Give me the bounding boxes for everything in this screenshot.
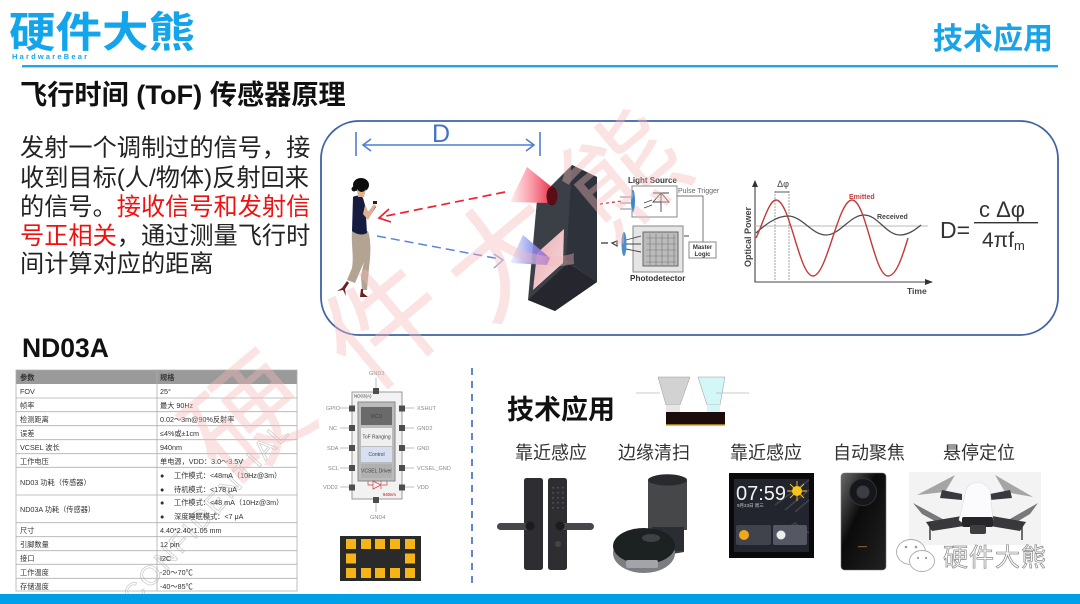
icon: smart display: 07:59 [736, 483, 786, 505]
table: ND03A specs: 误差 [20, 429, 34, 438]
photodetector schematic: Master [693, 245, 713, 251]
formula: 4πf [982, 229, 1014, 252]
text block: explanation: 收到目标(人/物体)反射回来 [20, 165, 309, 192]
watermark: pink brand characters: 大 [419, 168, 594, 345]
table: ND03A specs: 工作温度 [20, 568, 49, 577]
icon: ToF sensor device [510, 165, 597, 311]
labels: application names: 靠近感应 [515, 443, 587, 463]
photodetector schematic [622, 226, 716, 283]
dashed links to schematic [600, 201, 622, 246]
labels: application names [515, 443, 1015, 463]
block diagram: ND03A pinout: GND3 [369, 371, 385, 377]
block diagram: ND03A pinout: GND2 [417, 426, 433, 432]
block diagram: ND03A pinout: VDD2 [323, 485, 338, 491]
labels: application names: 边缘清扫 [618, 443, 690, 463]
icon: smart display: 9月23日 周三 [737, 503, 764, 509]
logo: 硬件大熊 [9, 9, 195, 56]
table: ND03A specs: 检测距离 [20, 415, 49, 424]
table: ND03A specs: 帧率 [20, 401, 34, 410]
icon: robot vacuum [613, 474, 687, 573]
labels: application names: 靠近感应 [730, 443, 802, 463]
light source schematic: Light Source [628, 176, 677, 185]
icon: walking woman [337, 178, 377, 297]
text block: explanation [20, 135, 310, 278]
table: ND03A specs: 工作模式：<48 mA（10Hz@3m） [174, 498, 283, 507]
section tag: 技术应用: 技术应用 [933, 23, 1053, 56]
diagram: FOV cones [636, 377, 749, 426]
icon: smartphone [841, 473, 886, 570]
table: ND03A specs: 规格 [160, 373, 175, 382]
table: ND03A specs: -20～70℃ [160, 568, 193, 577]
labels: application names: 自动聚焦 [833, 443, 905, 463]
watermark: pink brand characters: 熊 [539, 88, 714, 265]
block diagram: ND03A pinout: VCSEL_GND [417, 466, 451, 472]
formula [940, 197, 1038, 253]
distance marker D [356, 120, 540, 156]
chart: emitted vs received: Δφ [777, 179, 789, 189]
table: ND03A specs: ● [160, 498, 164, 507]
chart: emitted vs received: Time [907, 286, 927, 296]
light source schematic: Pulse Trigger [678, 188, 720, 195]
photodetector schematic: Photodetector [630, 274, 686, 283]
block diagram: ND03A pinout: GND [417, 446, 429, 452]
table: ND03A specs: 工作电压 [20, 457, 49, 466]
table: ND03A specs: 深度睡眠模式：<7 μA [174, 512, 244, 521]
formula: m [1014, 238, 1025, 253]
divider: dashed vertical [471, 368, 473, 588]
table: ND03A specs: 25° [160, 387, 171, 396]
light source schematic [620, 176, 720, 242]
arrow: received blue [377, 236, 503, 268]
header rule [22, 65, 1058, 67]
arrow: emitted red [379, 192, 505, 222]
table: ND03A specs: ≤4%或±1cm [160, 429, 199, 438]
watermark: pink brand characters: 件 [299, 238, 474, 415]
footer bar [0, 594, 1080, 604]
table: ND03A specs: FOV [20, 387, 35, 396]
block diagram: ND03A pinout: MCU [371, 414, 383, 420]
table: ND03A specs: 待机模式：<178 μA [174, 485, 237, 494]
table: ND03A specs: ND03A 功耗（传感器） [20, 505, 95, 514]
table: ND03A specs: ● [160, 471, 164, 480]
watermark: pink brand characters: 硬 [162, 333, 337, 510]
block diagram: ND03A pinout: NC [329, 426, 337, 432]
chart: emitted vs received: Emitted [849, 194, 875, 201]
table: ND03A specs: 12 pin [160, 540, 180, 549]
table: ND03A specs: VCSEL 波长 [20, 443, 60, 452]
heading: applications: 技术应用 [507, 395, 615, 425]
block diagram: ND03A pinout: VCSEL Driver [361, 468, 392, 474]
distance marker D: D [432, 120, 450, 148]
icon: smart display [729, 473, 814, 558]
block diagram: ND03A pinout: Control [368, 452, 385, 458]
logo subtitle: HardwareBear [12, 52, 89, 61]
labels: application names: 悬停定位 [943, 443, 1015, 463]
block diagram: ND03A pinout: GPIO [326, 406, 341, 412]
table: ND03A specs: 尺寸 [20, 526, 34, 535]
text block: explanation: 的信号。接收信号和发射信 [20, 194, 310, 221]
table: ND03A specs: 940nm [160, 443, 182, 452]
heading: ND03A: ND03A [22, 333, 109, 363]
table: ND03A specs: 0.02～3m@90%反射率 [160, 415, 234, 424]
heading: ToF principle: 飞行时间 (ToF) 传感器原理 [20, 79, 346, 110]
table: ND03A specs: 单电源，VDD：3.0～3.5V [160, 457, 243, 466]
block diagram: ND03A pinout: SCL [328, 466, 339, 472]
icon: chip footprint [340, 536, 421, 581]
block diagram: ND03A pinout: 940nm [383, 492, 396, 497]
table: ND03A specs: 参数 [20, 373, 35, 382]
block diagram: ND03A pinout: ToF Ranging [362, 434, 391, 440]
table: ND03A specs [16, 370, 297, 591]
table: ND03A specs: ● [160, 512, 164, 521]
icon: drone [909, 472, 1041, 545]
watermark: pink brand characters [162, 88, 714, 510]
text block: explanation: 间计算对应的距离 [20, 251, 214, 278]
table: ND03A specs: ND03 功耗（传感器） [20, 478, 91, 487]
table: ND03A specs: 接口 [20, 554, 34, 563]
formula: D= [940, 217, 970, 243]
photodetector schematic: Logic [694, 252, 711, 258]
table: ND03A specs: 4.40*2.40*1.05 mm [160, 526, 222, 535]
chart: emitted vs received [743, 179, 933, 296]
watermark: WeChat account: 硬件大熊 [943, 544, 1046, 572]
table: ND03A specs: 存储温度 [20, 582, 49, 591]
text block: explanation: 发射一个调制过的信号，接 [20, 135, 310, 162]
block diagram: ND03A pinout: GND4 [370, 515, 386, 521]
table: ND03A specs: I2C [160, 554, 171, 563]
table: ND03A specs: 最大 90Hz [160, 401, 194, 410]
formula: c Δφ [979, 197, 1025, 222]
table: ND03A specs: 引脚数量 [20, 540, 49, 549]
chart: emitted vs received: Received [877, 214, 908, 221]
block diagram: ND03A pinout: VDD [417, 485, 429, 491]
watermark: WeChat account [896, 540, 1046, 572]
table: ND03A specs: -40～85℃ [160, 582, 193, 591]
table: ND03A specs: ● [160, 485, 164, 494]
table: ND03A specs: 工作模式：<48mA（10Hz@3m） [174, 471, 281, 480]
block diagram: ND03A pinout [323, 371, 451, 521]
text block: explanation: 号正相关，通过测量飞行时 [20, 223, 310, 250]
icon: smart door lock [497, 478, 594, 570]
panel: ToF diagram [321, 120, 1058, 335]
block diagram: ND03A pinout: XSHUT [417, 406, 437, 412]
block diagram: ND03A pinout: ND03(A) [354, 394, 372, 398]
chart: emitted vs received: Optical Power [743, 206, 753, 267]
block diagram: ND03A pinout: SDA [327, 446, 339, 452]
